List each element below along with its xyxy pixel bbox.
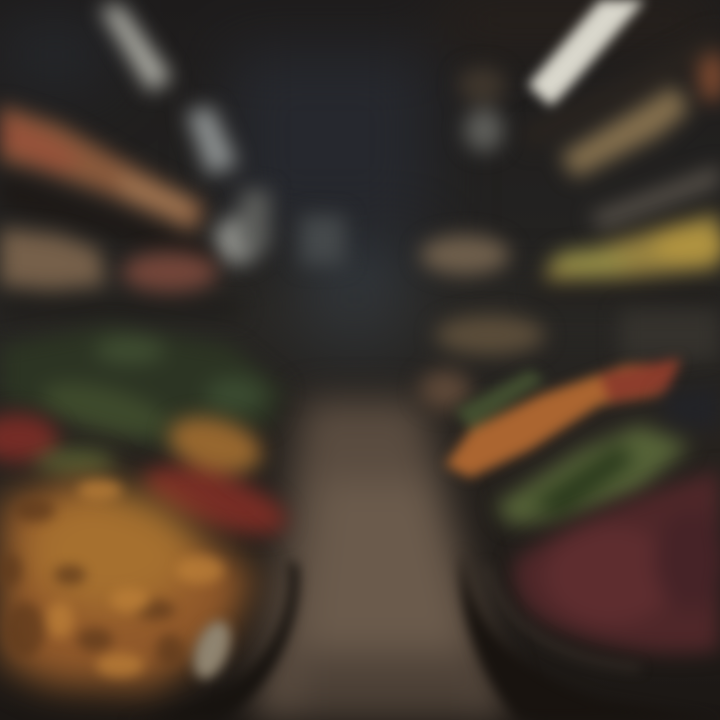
- ceiling lights: [100, 4, 506, 265]
- ceiling light: top right: [528, 0, 645, 108]
- right middle shelf yellow produce: [420, 212, 720, 302]
- right green vegetables: [495, 385, 720, 525]
- right bowl rim: [461, 550, 720, 720]
- right orange carrots: [445, 358, 680, 478]
- left green vegetables: [0, 325, 285, 450]
- left middle shelf produce: [0, 228, 240, 318]
- left upper shelf produce: [0, 105, 210, 268]
- right front beets bowl: [514, 470, 720, 653]
- aisle floor: [250, 400, 510, 720]
- left pile texture: [0, 480, 224, 677]
- right lower shelf goods: [419, 310, 720, 410]
- ceiling and back wall: [0, 0, 720, 350]
- left basket rim: [120, 560, 299, 720]
- right upper shelf produce: [520, 30, 720, 230]
- left front orange pile: [0, 475, 255, 690]
- left orange and red produce: [0, 407, 294, 548]
